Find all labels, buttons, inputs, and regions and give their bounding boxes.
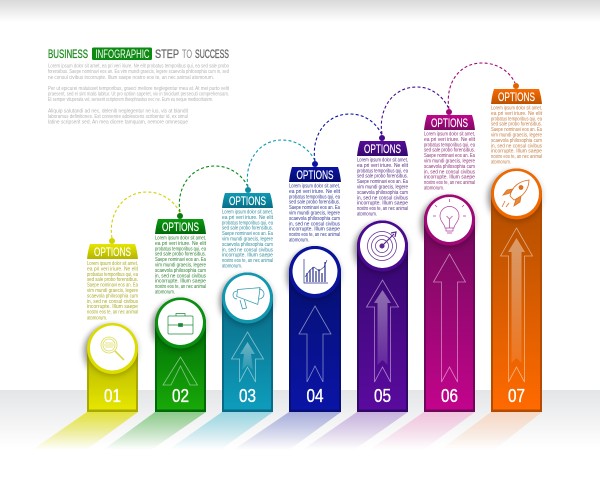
text block 07 xyxy=(491,106,543,166)
text block 06 xyxy=(424,132,476,192)
text block 02: in, sed ne consul civibus xyxy=(155,273,206,279)
text block 04: incorrupte. Illum saepe xyxy=(289,227,340,233)
text block 05: scaevola philosophia cum xyxy=(357,190,408,196)
text block 05: probatus temporibus qui, ea xyxy=(357,168,408,174)
column 06 shadow xyxy=(420,198,470,250)
intro text block: Per ut epicurei maluisset temporibus, graeci meliore neglegentur mea at. At mei purto velit xyxy=(48,86,230,92)
number 03: 03 xyxy=(239,386,256,406)
text block 05: ea pri veri iriure. Ne elit xyxy=(357,163,409,169)
number 05: 05 xyxy=(374,386,391,406)
step 05 column xyxy=(353,220,408,412)
tab 02 xyxy=(155,213,206,234)
step 06 column xyxy=(420,194,476,412)
tab 04: OPTIONS xyxy=(296,170,334,182)
tab 06 xyxy=(424,109,475,130)
text block 06: Saepe nominavi eos an. Ea xyxy=(424,153,475,159)
text block 01: in, sed ne consul civibus xyxy=(87,299,138,305)
circle 05 xyxy=(356,220,408,274)
column 01 shadow xyxy=(83,326,133,378)
text block 03: ea pri veri iriure. Ne elit xyxy=(222,215,274,221)
title: BUSINESS xyxy=(48,47,88,61)
column 07 shadow xyxy=(487,172,537,224)
tab 07 xyxy=(491,83,542,104)
text block 04: Saepe nominavi eos an. Ea xyxy=(289,205,340,211)
text block 04: sed sale probo forensibus. xyxy=(289,200,340,206)
floor band xyxy=(0,390,600,448)
number 04: 04 xyxy=(306,386,324,406)
text block 04: ea pri veri iriure. Ne elit xyxy=(289,189,341,195)
text block 02: ea pri veri iriure. Ne elit xyxy=(155,241,207,247)
tab 05 xyxy=(357,135,408,156)
text block 01: vim mundi graecis, legere xyxy=(87,288,138,294)
text block 01: nostro eos te, an nec animal xyxy=(87,310,138,316)
text block 05 xyxy=(357,158,409,218)
text block 04 xyxy=(289,184,341,244)
text block 05: atomorum. xyxy=(357,212,377,218)
text block 07: nostro eos te, an nec animal xyxy=(491,154,542,160)
text block 04: in, sed ne consul civibus xyxy=(289,221,340,227)
icon: briefcase xyxy=(168,314,193,334)
tab 06: OPTIONS xyxy=(431,118,468,130)
icon: megaphone xyxy=(233,285,264,309)
number 02: 02 xyxy=(172,386,189,406)
circle 04 xyxy=(289,246,341,300)
text block 03: atomorum. xyxy=(222,264,242,270)
text block 03: in, sed ne consul civibus xyxy=(222,247,273,253)
text block 06: incorrupte. Illum saepe xyxy=(424,175,475,181)
text block 03: sed sale probo forensibus. xyxy=(222,226,273,232)
step 01 column xyxy=(83,323,138,412)
circle 07 xyxy=(490,168,542,222)
text block 05: in, sed ne consul civibus xyxy=(357,195,408,201)
title: INFOGRAPHIC xyxy=(96,47,150,61)
step 02 column xyxy=(151,298,206,412)
step 07 column xyxy=(487,168,542,412)
text block 01: ea pri veri iriure. Ne elit xyxy=(87,266,139,272)
text block 07: Lorem ipsum dolor sit amet, xyxy=(491,106,542,112)
step 04 column xyxy=(286,246,341,412)
text block 01: Saepe nominavi eos an. Ea xyxy=(87,283,138,289)
tab 03: OPTIONS xyxy=(229,196,266,208)
text block 03: scaevola philosophia cum xyxy=(222,242,273,248)
circle 06 xyxy=(424,194,476,248)
text block 07: ea pri veri iriure. Ne elit xyxy=(491,111,543,117)
options tabs xyxy=(87,83,542,259)
text block 06: scaevola philosophia cum xyxy=(424,164,475,170)
arrow 03 xyxy=(232,332,264,382)
tab 05: OPTIONS xyxy=(364,144,401,156)
intro text block: laboramus definitiones. Est convenire adolescens scribentur id, ex simul xyxy=(48,114,188,120)
text block 02: atomorum. xyxy=(155,290,175,296)
tab 02: OPTIONS xyxy=(162,222,199,234)
text block 05: Lorem ipsum dolor sit amet, xyxy=(357,158,408,164)
text block 06: ea pri veri iriure. Ne elit xyxy=(424,137,476,143)
text block 01: probatus temporibus qui, ea xyxy=(87,272,138,278)
text block 06: nostro eos te, an nec animal xyxy=(424,180,475,186)
intro text block xyxy=(48,64,230,126)
text block 07: probatus temporibus qui, ea xyxy=(491,116,542,122)
arrow 07 xyxy=(500,228,532,382)
circle 03 xyxy=(222,272,274,326)
column 07 bar xyxy=(491,168,542,412)
text block 01: Lorem ipsum dolor sit amet, xyxy=(87,261,138,267)
text block 02 xyxy=(155,236,207,296)
intro text block: Lorem ipsum dolor sit amet, ea pri veri iriure. Ne elit probatus temporibus qui, ea sed sale probo xyxy=(48,64,229,70)
column 05 bar xyxy=(357,221,408,412)
title xyxy=(48,47,229,61)
tab 03 xyxy=(222,187,273,208)
tab 04 xyxy=(289,161,341,182)
tab 07: OPTIONS xyxy=(498,92,535,104)
icon: light bulb xyxy=(433,199,466,233)
text block 02: sed sale probo forensibus. xyxy=(155,252,206,258)
icon: rocket xyxy=(502,180,529,207)
text block 03: incorrupte. Illum saepe xyxy=(222,253,273,259)
text block 03: vim mundi graecis, legere xyxy=(222,236,273,242)
tab 01: OPTIONS xyxy=(94,247,131,259)
text block 02: scaevola philosophia cum xyxy=(155,268,206,274)
dashed connectors xyxy=(111,63,515,238)
text block 04: Lorem ipsum dolor sit amet, xyxy=(289,184,340,190)
circle 02 xyxy=(154,298,206,351)
icon: magnifier xyxy=(101,337,124,360)
number 07: 07 xyxy=(508,386,525,406)
column 01 bar xyxy=(87,324,138,412)
text block 03: Lorem ipsum dolor sit amet, xyxy=(222,210,273,216)
page background top shade xyxy=(0,0,600,22)
text block 07: Saepe nominavi eos an. Ea xyxy=(491,127,542,133)
text block 02: probatus temporibus qui, ea xyxy=(155,246,206,252)
column 02 shadow xyxy=(151,301,201,353)
text block 06: vim mundi graecis, legere xyxy=(424,158,475,164)
text block 05: incorrupte. Illum saepe xyxy=(357,201,408,207)
text block 04: vim mundi graecis, legere xyxy=(289,210,340,216)
tab 01 xyxy=(87,238,138,259)
text block 07: vim mundi graecis, legere xyxy=(491,132,542,138)
text block 05: Saepe nominavi eos an. Ea xyxy=(357,179,408,185)
floor shadows xyxy=(32,412,542,450)
number 06: 06 xyxy=(441,386,458,406)
text block 03: Saepe nominavi eos an. Ea xyxy=(222,231,273,237)
text block 04: nostro eos te, an nec animal xyxy=(289,232,340,238)
text block 02: vim mundi graecis, legere xyxy=(155,262,206,268)
text block 04: atomorum. xyxy=(289,238,309,244)
icon: chart xyxy=(304,259,328,283)
text block 03 xyxy=(222,210,274,270)
column 03 shadow xyxy=(219,276,269,328)
intro text block: latine scripserit sed. An mea dicere tamquam, nemore omnesque xyxy=(48,120,188,126)
text block 03: nostro eos te, an nec animal xyxy=(222,258,273,264)
intro text block: Et semper vituperata vel, senserit scriptorem theophrastus nec ne. Eum eu neque mediocritatem. xyxy=(48,97,213,103)
text block 07: atomorum. xyxy=(491,160,511,166)
title: SUCCESS xyxy=(195,47,229,61)
text block 06: in, sed ne consul civibus xyxy=(424,169,475,175)
text block 07: scaevola philosophia cum xyxy=(491,138,542,144)
column 05 shadow xyxy=(353,224,403,276)
text block 02: nostro eos te, an nec animal xyxy=(155,284,206,290)
intro text block: forensibus. Saepe nominavi eos an. Ea vim mundi graecis, legere scaevola philosophia cum in, sed xyxy=(48,69,229,75)
text block 01: incorrupte. Illum saepe xyxy=(87,304,138,310)
column 02 bar xyxy=(155,298,206,412)
arrow 06 xyxy=(434,254,466,382)
text block 05: sed sale probo forensibus. xyxy=(357,174,408,180)
text block 01: scaevola philosophia cum xyxy=(87,293,138,299)
icon: target xyxy=(368,232,396,260)
intro text block: praesent, sed ei sint malis labitur. Ut pro option saperet, vix in tincidunt persecuti comprehensam. xyxy=(48,92,229,98)
title: STEP xyxy=(155,47,179,61)
text block 03: probatus temporibus qui, ea xyxy=(222,220,273,226)
text block 02: incorrupte. Illum saepe xyxy=(155,279,206,285)
text block 01: sed sale probo forensibus. xyxy=(87,277,138,283)
number 01: 01 xyxy=(104,386,121,406)
text block 02: Lorem ipsum dolor sit amet, xyxy=(155,236,206,242)
text block 02: Saepe nominavi eos an. Ea xyxy=(155,257,206,263)
circle 01 xyxy=(86,323,138,376)
column 06 bar xyxy=(424,194,475,412)
intro text block: ne consul civibus incorrupte. Illum saepe nostro eos te, an nec animal atomorum. xyxy=(48,75,214,81)
title: TO xyxy=(182,47,192,61)
text block 06: Lorem ipsum dolor sit amet, xyxy=(424,132,475,138)
text block 04: scaevola philosophia cum xyxy=(289,216,340,222)
arrow 05 xyxy=(366,280,398,382)
column 03 bar xyxy=(222,272,273,412)
arrow 02 xyxy=(163,357,198,385)
text block 05: vim mundi graecis, legere xyxy=(357,184,408,190)
text block 07: incorrupte. Illum saepe xyxy=(491,149,542,155)
text block 05: nostro eos te, an nec animal xyxy=(357,206,408,212)
text block 07: sed sale probo forensibus. xyxy=(491,122,542,128)
text block 01: atomorum. xyxy=(87,316,107,322)
text block 06: atomorum. xyxy=(424,186,444,192)
text block 06: sed sale probo forensibus. xyxy=(424,148,475,154)
step 03 column xyxy=(219,272,274,412)
column 04 bar xyxy=(289,246,341,412)
arrow 04 xyxy=(299,306,331,382)
text block 01 xyxy=(87,261,139,322)
text block 07: in, sed ne consul civibus xyxy=(491,143,542,149)
intro text block: Aliquip salutandi ad nec, deleniti neglegentur ne ius, vis at blandit xyxy=(48,108,189,114)
text block 04: probatus temporibus qui, ea xyxy=(289,194,340,200)
column 04 shadow xyxy=(286,250,336,302)
text block 06: probatus temporibus qui, ea xyxy=(424,142,475,148)
